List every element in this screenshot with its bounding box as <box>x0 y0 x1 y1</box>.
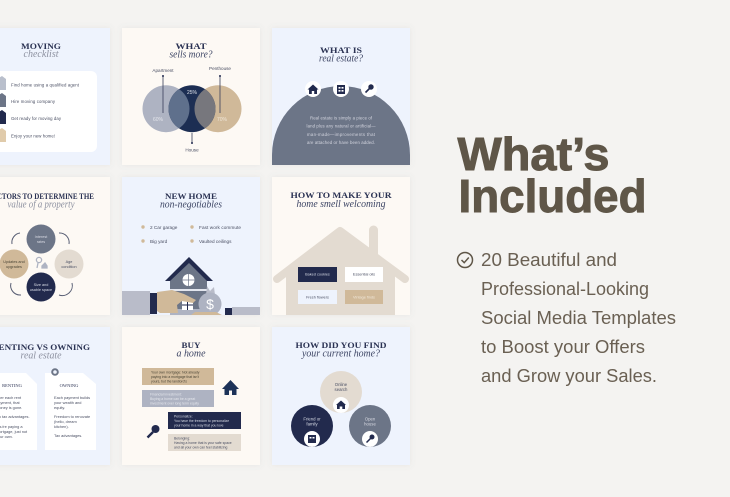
icon: home <box>305 81 321 97</box>
card: owning: Each payment builds <box>54 395 90 400</box>
description text: land plus any natural or artificial— <box>306 124 376 128</box>
subtitle: sells more: sells more? <box>170 50 212 60</box>
box: belonging: and all your own can feel stabilizing <box>174 446 227 450</box>
dome <box>272 86 410 165</box>
subtitle: value of a property: value of a property <box>8 200 75 210</box>
venn diagram: House <box>185 148 199 152</box>
box: belonging <box>168 434 241 451</box>
icon: key <box>148 425 160 438</box>
title: new home: NEW HOME <box>165 191 217 201</box>
panel: moving checklist <box>0 28 110 165</box>
subtitle: home smell welcoming: home smell welcoming <box>296 199 386 210</box>
box: personalize: Personalize: <box>174 414 193 418</box>
venn diagram: 60% <box>153 117 164 123</box>
card: renting <box>0 373 37 450</box>
box: your own mortgage <box>142 368 214 385</box>
bullet list: 2 Car garage <box>150 225 178 230</box>
checklist items: Hire moving company <box>11 99 56 104</box>
factor circles: Size and <box>34 283 48 287</box>
checklist items <box>11 82 80 138</box>
title: moving: MOVING <box>21 41 61 51</box>
panel: factors <box>0 177 110 315</box>
box: personalize: You have the freedom to personalize <box>174 419 229 423</box>
bullet list: Big yard <box>150 239 168 244</box>
box: your own mortgage: yours, but the landlord's <box>151 380 187 384</box>
box: financial investment <box>142 390 214 407</box>
circle: online search <box>320 371 362 413</box>
subtitle: non-negotiables: non-negotiables <box>160 200 222 210</box>
subtitle: a home: a home <box>176 348 206 360</box>
card: renting: RENTING <box>2 383 23 388</box>
circle: online search: Online <box>335 382 348 387</box>
option box: fresh flowers: Fresh flowers <box>306 296 329 300</box>
panel: what is real estate <box>272 28 410 165</box>
body text: 20 Beautiful and <box>481 250 617 270</box>
circle: open house: Open <box>365 416 376 422</box>
box: personalize: your home in a way that you love <box>174 424 224 428</box>
heading: what's included: What’s <box>458 128 610 180</box>
box: financial investment: Buying a home can be a great <box>150 397 195 401</box>
card: owning <box>45 373 96 450</box>
bullet list: Vaulted ceilings <box>199 239 232 244</box>
box: financial investment: investment over long term equity <box>150 402 199 406</box>
subtitle: real estate: real estate? <box>319 54 363 64</box>
heading: what's included: Included <box>458 170 646 222</box>
title: what is: WHAT IS <box>320 45 362 55</box>
venn diagram: Penthouse <box>209 66 231 71</box>
panel: how did you find <box>272 327 410 465</box>
white checklist panel <box>0 71 97 152</box>
description text <box>306 116 376 145</box>
heading: what's included <box>458 128 646 222</box>
card: owning: your wealth and <box>54 400 81 405</box>
box: belonging: Belonging: <box>174 436 190 440</box>
card: owning: equity. <box>54 405 65 410</box>
title: buy: BUY <box>182 340 201 350</box>
panel: how to make your home smell welcoming <box>272 177 410 315</box>
bullet list <box>141 225 241 244</box>
box: your own mortgage: paying into a mortgage that isn't <box>151 375 199 379</box>
description text: man-made—improvements that <box>307 132 376 137</box>
body text: and Grow your Sales. <box>481 366 657 386</box>
title: how did you find: HOW DID YOU FIND <box>296 340 386 350</box>
icon: building <box>333 81 349 97</box>
house and hands illustration: $ <box>206 296 214 312</box>
bullet list: Fast work commute <box>199 225 241 230</box>
venn diagram: 25% <box>187 90 198 96</box>
circle: friend or family: Friend or <box>303 416 321 422</box>
checklist icons <box>0 76 6 142</box>
venn diagram: Apartment <box>152 68 174 73</box>
factor circles: usable space <box>30 288 52 292</box>
card: owning: OWNING <box>60 383 79 388</box>
venn diagram: 70% <box>217 117 228 123</box>
option box: vintage finds: Vintage finds <box>353 296 375 300</box>
card: owning: kitchen). <box>54 424 69 429</box>
subtitle: real estate: real estate <box>20 350 62 362</box>
checklist items: Find home using a qualified agent <box>11 82 80 88</box>
house shape <box>277 226 405 315</box>
panel: what sells more <box>122 28 260 165</box>
cycle arrows <box>11 233 72 296</box>
checklist items: Enjoy your new home! <box>11 134 55 138</box>
box: personalize <box>168 412 241 429</box>
factor circles <box>0 224 84 302</box>
circle: friend or family <box>291 405 333 447</box>
factor circles: condition <box>61 265 77 269</box>
box: your own mortgage: Your own mortgage: Not already <box>151 370 200 374</box>
option box: baked cookies: Baked cookies <box>305 272 330 276</box>
panel: new home <box>122 177 260 316</box>
circle: open house: house <box>364 422 376 426</box>
factor circles: upgrades <box>6 265 22 269</box>
body text: Professional-Looking <box>481 279 649 299</box>
panel: buy a home <box>122 327 260 465</box>
icon: key and house <box>36 257 47 268</box>
description text: are attached or have been added. <box>307 140 375 145</box>
card: owning: (hello, dream <box>54 419 77 424</box>
factor circles: Updates and <box>3 260 25 264</box>
subtitle: your current home: your current home? <box>301 348 380 360</box>
ring icon <box>52 369 58 375</box>
description text: Real estate is simply a piece of <box>310 116 373 120</box>
circle: friend or family: family <box>306 422 318 426</box>
icon: key <box>361 81 377 97</box>
icon: check circle <box>458 252 472 268</box>
venn diagram <box>142 66 242 152</box>
circle: online search: search <box>335 387 348 392</box>
option box: essential oils: Essential oils <box>353 272 375 276</box>
circle: open house <box>349 405 391 447</box>
factor circles: rates <box>37 240 45 244</box>
body text: Social Media Templates <box>481 308 676 328</box>
factor circles: Age <box>66 260 72 264</box>
panel: renting vs owning <box>0 327 110 465</box>
title: what: WHAT <box>176 41 207 51</box>
box: belonging: Having a home that is your safe space <box>174 441 232 445</box>
box: financial investment: Financial investment: <box>150 392 182 396</box>
title: how to make your: HOW TO MAKE YOUR <box>290 190 392 200</box>
body text: to Boost your Offers <box>481 337 645 357</box>
factor circles: Interest <box>35 235 48 239</box>
checklist items: Get ready for moving day <box>11 116 62 121</box>
subtitle: checklist: checklist <box>24 49 59 60</box>
card: owning: Freedom to renovate <box>54 414 90 419</box>
body text <box>481 250 676 386</box>
icon: home <box>222 380 239 395</box>
card: owning: Tax advantages. <box>54 433 82 438</box>
